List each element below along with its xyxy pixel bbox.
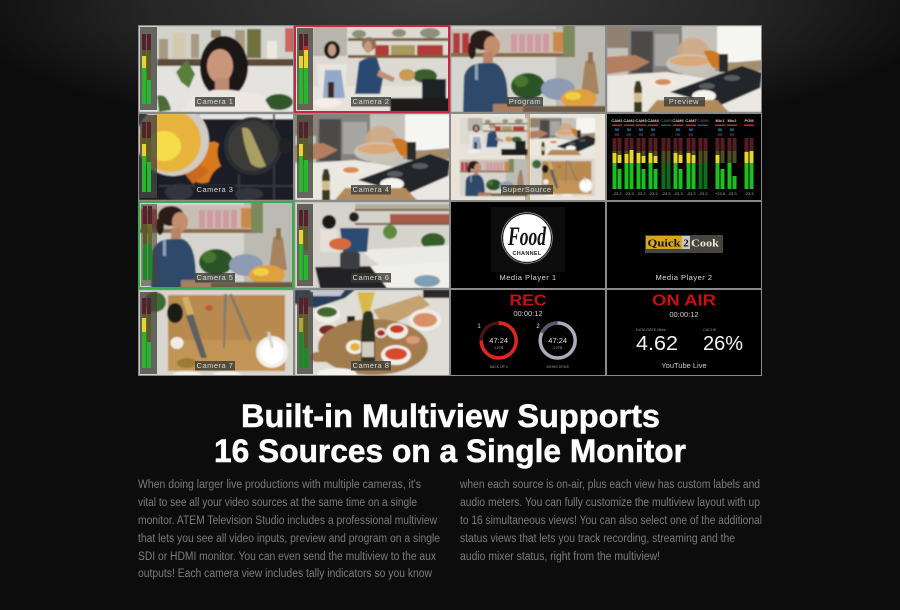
cell: Camera 5 with green tally border bbox=[139, 202, 294, 288]
disk 1 ring bbox=[477, 323, 516, 369]
multiview monitor grid bbox=[137, 25, 762, 380]
audio values: -23.3 bbox=[744, 191, 754, 196]
audio channel labels: CAM4 bbox=[647, 118, 659, 123]
icon: Quick 2 Cook logo: Quick bbox=[648, 238, 682, 250]
title bbox=[214, 398, 686, 469]
audio dots: 0V bbox=[651, 132, 656, 137]
body text: left column: outputs! Each camera view includes tally indicators so you know bbox=[138, 568, 433, 580]
audio dots: 50 bbox=[676, 127, 681, 132]
audio channel labels: CAM6 bbox=[672, 118, 684, 123]
title: 16 Sources on a Single Monitor bbox=[214, 433, 686, 469]
disk 1 ring: BACK UP 4 bbox=[490, 365, 508, 369]
stream destination: YouTube Live bbox=[661, 361, 707, 370]
label: Camera 1: Camera 1 bbox=[197, 97, 233, 106]
audio channel labels: CAM5 bbox=[660, 118, 672, 123]
label: Preview: Preview bbox=[669, 97, 699, 106]
meter: Camera 4 bbox=[297, 115, 313, 198]
audio channel labels: CAM2 bbox=[623, 118, 635, 123]
ON AIR heading: ON AIR bbox=[652, 292, 716, 310]
audio values: -23.3 bbox=[698, 191, 708, 196]
audio values: -23.3 bbox=[686, 191, 696, 196]
cell: audio mixer meters bbox=[607, 114, 761, 200]
audio channel labels: CAM8 bbox=[697, 118, 709, 123]
label: Media Player 1: Media Player 1 bbox=[499, 273, 557, 282]
cell: Camera 8 bbox=[295, 290, 449, 375]
audio level bars bbox=[612, 138, 754, 189]
body text: left column bbox=[138, 479, 440, 580]
label: Camera 2: Camera 2 bbox=[353, 97, 389, 106]
icon: Quick 2 Cook logo: Cook bbox=[691, 238, 720, 250]
cell: Program bbox=[451, 26, 605, 112]
meter: Camera 7 bbox=[140, 292, 157, 374]
meter: Camera 5 bbox=[141, 204, 157, 286]
audio dots: 0V bbox=[718, 132, 723, 137]
audio dots: 0V bbox=[639, 132, 644, 137]
cell: Preview bbox=[607, 26, 761, 112]
cache stat: CACHE bbox=[703, 328, 717, 332]
cell: streaming status bbox=[607, 290, 761, 375]
label: Preview bbox=[664, 97, 705, 106]
audio channel labels: PGM bbox=[744, 118, 754, 123]
disk 1 ring: 47:24 bbox=[489, 336, 508, 345]
icon: Quick 2 Cook logo bbox=[645, 235, 723, 253]
label: SuperSource: SuperSource bbox=[502, 185, 552, 194]
audio values: -23.3 bbox=[624, 191, 634, 196]
audio meters on camera views bbox=[140, 27, 313, 374]
audio values: -23.3 bbox=[636, 191, 646, 196]
audio dots: 50 bbox=[615, 127, 620, 132]
cell: Media Player 2 bbox=[607, 202, 761, 288]
audio channel labels: Mic1 bbox=[716, 118, 725, 123]
disk 2 ring: 1.2TB bbox=[553, 346, 563, 350]
source labels bbox=[195, 97, 705, 370]
REC heading: REC bbox=[510, 292, 546, 310]
audio dots: 0V bbox=[627, 132, 632, 137]
disk 2 ring: 47:24 bbox=[548, 336, 567, 345]
body text: right column bbox=[459, 479, 762, 563]
audio values: +23.8 bbox=[715, 191, 726, 196]
audio dots: 50 bbox=[718, 127, 723, 132]
body text: left column: vital to see all your video sources at the same time on a single bbox=[138, 497, 417, 509]
audio dots: 50 bbox=[730, 127, 735, 132]
audio values: -23.3 bbox=[727, 191, 737, 196]
audio values: -23.3 bbox=[648, 191, 658, 196]
title: Built-in Multiview Supports bbox=[241, 398, 660, 434]
label: Camera 4: Camera 4 bbox=[353, 185, 389, 194]
icon: Food Channel logo: Food bbox=[507, 222, 547, 251]
audio values: -23.3 bbox=[673, 191, 683, 196]
body text: right column: to 16 simultaneous views! You can also select one of the additional bbox=[460, 515, 762, 527]
data rate stat: 4.62 bbox=[636, 333, 678, 355]
cell: Camera 4 bbox=[295, 114, 449, 200]
cell: Camera 1 bbox=[139, 26, 293, 112]
audio channel labels: Mic2 bbox=[728, 118, 737, 123]
disk 1 ring: 1 bbox=[477, 324, 481, 330]
body text: left column: that lets you see all video inputs, preview and program on a single bbox=[138, 533, 440, 545]
label: Media Player 2: Media Player 2 bbox=[655, 273, 713, 282]
audio dots: 0V bbox=[730, 132, 735, 137]
audio dots: 0V bbox=[676, 132, 681, 137]
label: Program: Program bbox=[509, 97, 541, 106]
audio values: -23.3 bbox=[612, 191, 622, 196]
cell: recording status bbox=[451, 290, 605, 375]
audio channel labels: CAM7 bbox=[685, 118, 697, 123]
body text: right column: audio mixer status, right from the multiview! bbox=[460, 551, 660, 563]
body text: left column: When doing larger live productions with multiple cameras, it's bbox=[138, 479, 421, 491]
label: Camera 6: Camera 6 bbox=[353, 273, 389, 282]
disk 2 ring: 2 bbox=[536, 324, 540, 330]
cell: Camera 7 bbox=[139, 290, 293, 375]
icon: Food Channel logo bbox=[501, 212, 553, 264]
audio channel labels: CAM3 bbox=[635, 118, 647, 123]
label: Camera 7: Camera 7 bbox=[197, 361, 233, 370]
meter: Camera 2 bbox=[297, 28, 313, 110]
audio dots bbox=[615, 127, 735, 137]
audio dots: 0V bbox=[615, 132, 620, 137]
icon: Food Channel logo: CHANNEL bbox=[512, 251, 542, 257]
cell: Camera 3 bbox=[139, 114, 293, 200]
audio channel labels bbox=[611, 118, 754, 123]
meter: Camera 6 bbox=[297, 204, 313, 286]
audio dots: 50 bbox=[651, 127, 656, 132]
audio tally lines bbox=[612, 124, 754, 126]
stream timer: 00:00:12 bbox=[669, 310, 699, 319]
body text: right column: audio meters. You can fully customize the multiview layout with up bbox=[460, 497, 760, 509]
data rate stat: DATA RATE Mb/s bbox=[636, 328, 666, 332]
audio channel labels: CAM1 bbox=[611, 118, 623, 123]
body text: left column: monitor. ATEM Television Studio includes a professional multiview bbox=[138, 515, 438, 527]
cell: SuperSource bbox=[451, 114, 605, 200]
label: Camera 8: Camera 8 bbox=[353, 361, 389, 370]
body text: left column: SDI or HDMI monitor. You can even send the multiview to the aux bbox=[138, 551, 436, 563]
disk 1 ring: 1.2TB bbox=[494, 346, 504, 350]
cell: Media Player 1 bbox=[451, 202, 605, 288]
label: Camera 3: Camera 3 bbox=[197, 185, 233, 194]
meter: Camera 1 bbox=[140, 27, 157, 110]
cache stat: 26% bbox=[703, 333, 743, 355]
icon: Quick 2 Cook logo: 2 bbox=[683, 238, 689, 250]
audio dots: 0V bbox=[689, 132, 694, 137]
cell: Camera 6 bbox=[295, 202, 449, 288]
meter: Camera 8 bbox=[297, 292, 313, 374]
disk 2 ring: JOHNS DRIVE bbox=[546, 365, 570, 369]
disk 2 ring bbox=[536, 323, 575, 369]
audio dots: 50 bbox=[627, 127, 632, 132]
body text: right column: status views that lets you track recording, streaming and the bbox=[460, 533, 735, 545]
audio values bbox=[612, 191, 754, 196]
audio values: -23.3 bbox=[661, 191, 671, 196]
recording timer: 00:00:12 bbox=[513, 309, 543, 318]
label: Camera 5: Camera 5 bbox=[197, 273, 233, 282]
audio dots: 50 bbox=[639, 127, 644, 132]
body text: right column: when each source is on-air, plus each view has custom labels and bbox=[459, 479, 760, 491]
cell: Camera 2 with red tally border bbox=[295, 26, 450, 112]
meter: Camera 3 bbox=[140, 115, 157, 198]
audio dots: 50 bbox=[689, 127, 694, 132]
